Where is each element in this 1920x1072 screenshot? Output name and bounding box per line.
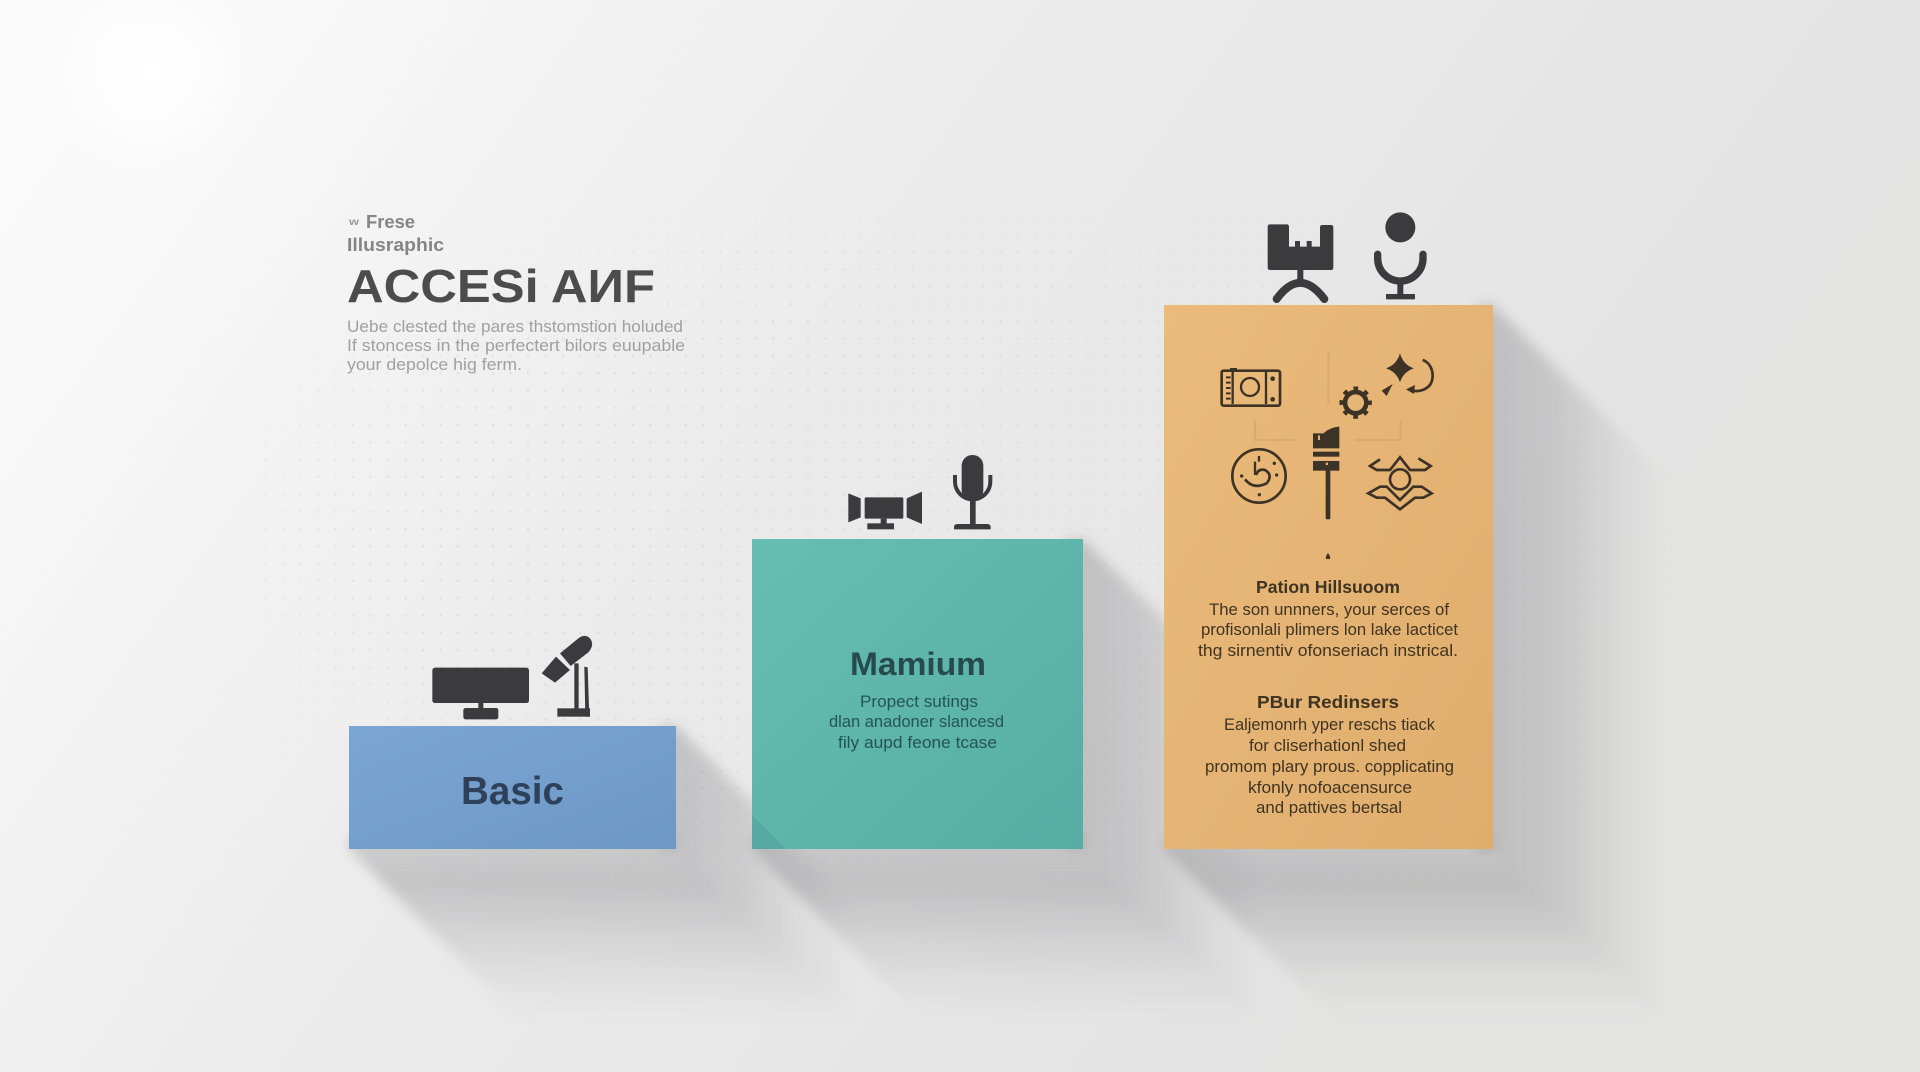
medium description: [829, 693, 1004, 752]
heading: ACCESi AИF: [347, 260, 655, 312]
feature body: kfonly nofoacensurce: [1248, 779, 1412, 797]
icon: brush: [1313, 427, 1339, 519]
small drop mark: [1326, 553, 1330, 559]
panel: premium tier: [1164, 212, 1493, 849]
medium description: dlan anadoner slancesd: [829, 713, 1004, 731]
feature body: and pattives bertsal: [1256, 799, 1402, 817]
intro paragraph: If stoncess in the perfectert bilors euupable: [347, 337, 685, 355]
label: Mamium: Mamium: [850, 646, 986, 682]
medium description: Propect sutings: [860, 693, 978, 711]
feature body: [1205, 716, 1454, 817]
feature body: for cliserhationl shed: [1249, 737, 1406, 755]
feature heading: PBur Redinsers: [1257, 692, 1399, 712]
eyebrow text: Frese: [366, 212, 415, 232]
orange bar: [1164, 305, 1493, 849]
text block: second feature: [1205, 692, 1454, 817]
feature body: promom plary prous. copplicating: [1205, 758, 1454, 776]
label: Basic: Basic: [461, 770, 564, 813]
icon: dial: [1232, 449, 1286, 503]
feature body: thg sirnentiv ofonseriach instrical.: [1198, 642, 1458, 660]
feature body: [1198, 601, 1458, 660]
feature body: The son unnners, your serces of: [1209, 601, 1449, 619]
icon: desk microphone: [542, 636, 592, 717]
text block: first feature: [1198, 577, 1458, 660]
icon: photo camera: [1222, 368, 1280, 406]
icon: microphone: [954, 455, 991, 529]
cast shadow corner: [752, 815, 786, 849]
medium description: fily aupd feone tcase: [838, 734, 997, 752]
icon: sparkle and arrows: [1382, 353, 1433, 396]
feature body: profisonlali plimers lon lake lacticet: [1201, 621, 1458, 639]
icon: video camera: [848, 492, 922, 529]
teal bar: [752, 539, 1083, 849]
icon: round microphone: [1378, 212, 1423, 299]
icon cluster: [1222, 352, 1433, 519]
eyebrow mark: w: [348, 217, 359, 228]
blue bar: [349, 726, 676, 849]
intro paragraph: your depolce hig ferm.: [347, 356, 522, 374]
feature heading: Pation Hillsuoom: [1256, 577, 1400, 597]
panel: basic tier: [349, 636, 676, 849]
feature body: Ealjemonrh yper reschs tiack: [1224, 716, 1436, 734]
subtitle: Illusraphic: [347, 235, 444, 255]
intro paragraph: [347, 318, 685, 374]
icon: camera on stand: [1268, 224, 1333, 299]
icon: gear: [1341, 388, 1370, 417]
panel: medium tier: [752, 455, 1083, 849]
icon: eye ornament: [1368, 457, 1432, 509]
icon: monitor: [432, 668, 529, 719]
intro paragraph: Uebe clested the pares thstomstion holuded: [347, 318, 683, 336]
title block: [347, 212, 685, 374]
